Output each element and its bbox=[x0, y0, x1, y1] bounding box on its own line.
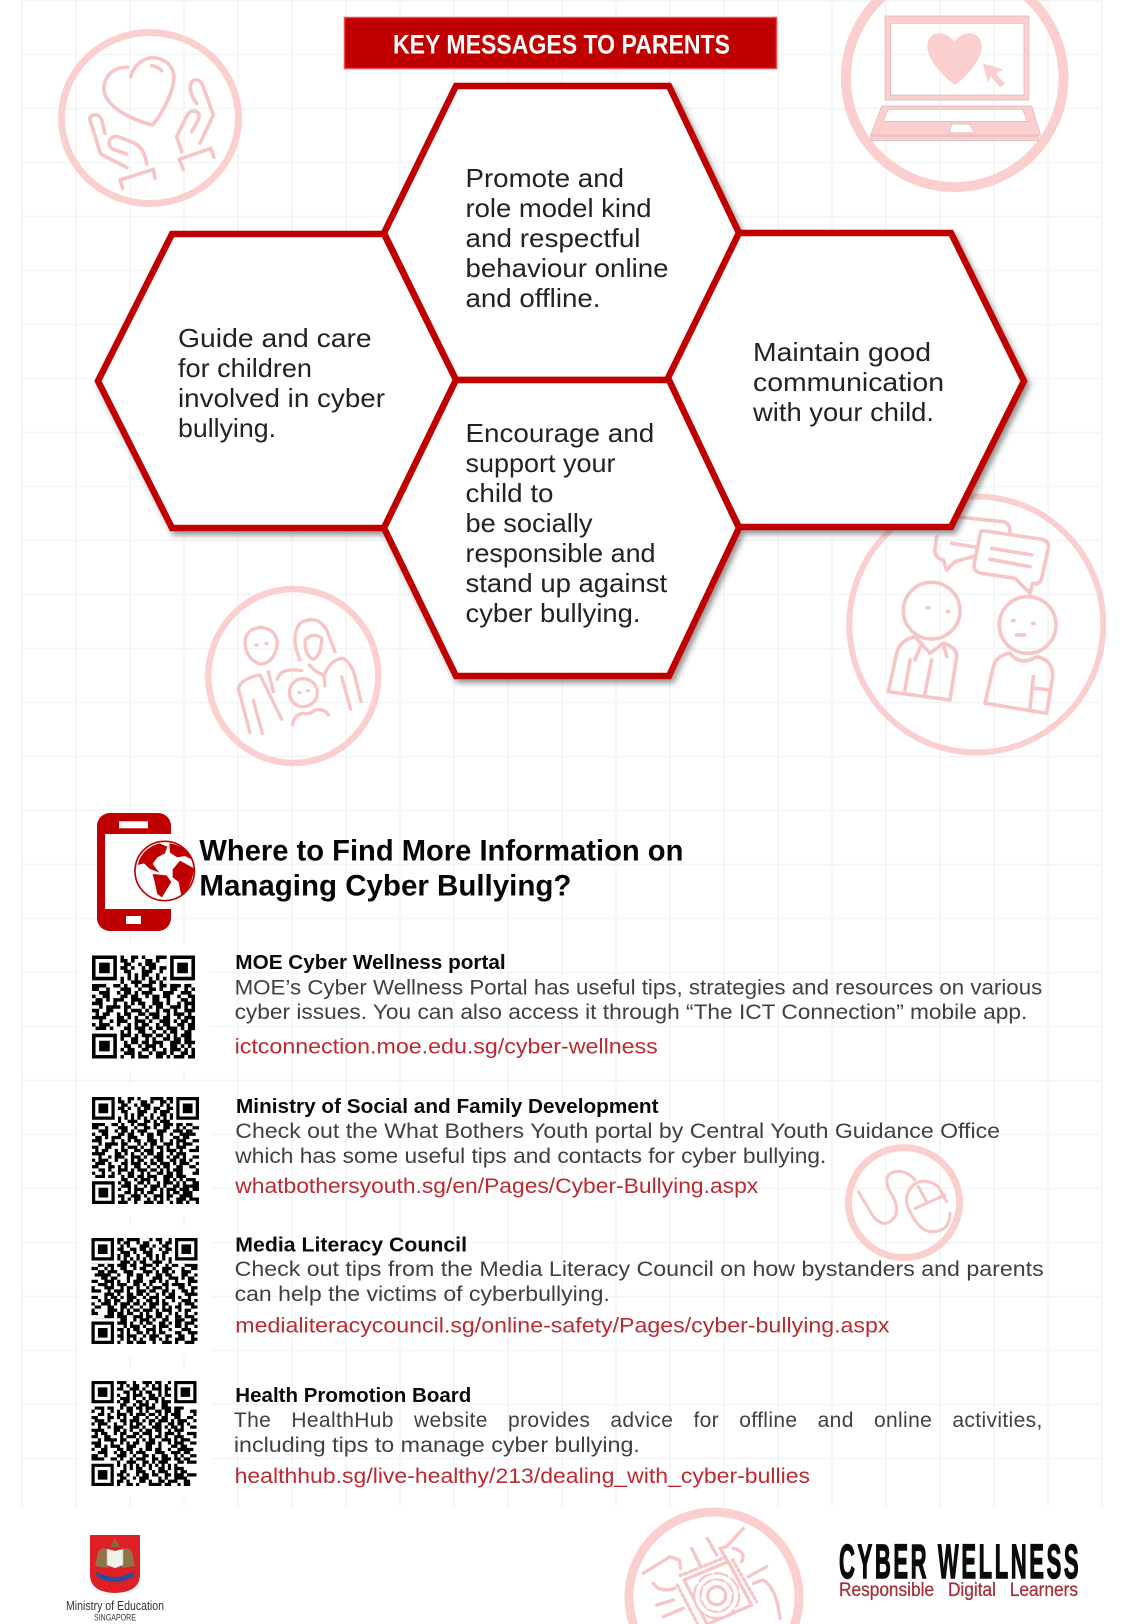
panel: MOE Cyber Wellness resource bbox=[78, 943, 1042, 1071]
hexagon text: communication bbox=[752, 337, 944, 427]
panel: MOE Cyber Wellness resource: ictconnection.moe.edu.sg/cyber-wellness bbox=[235, 1035, 658, 1058]
panel: Health Promotion Board resource: including tips to manage cyber bullying. bbox=[234, 1434, 640, 1457]
panel: Media Literacy Council resource: Media Literacy Council bbox=[235, 1234, 467, 1256]
logo: Cyber Wellness: CYBER WELLNESS bbox=[839, 1534, 1079, 1588]
panel: Media Literacy Council resource: medialiteracycouncil.sg/online-safety/Pages/cyber-bullying.aspx bbox=[235, 1314, 890, 1337]
panel: MOE Cyber Wellness resource: MOE’s Cyber Wellness Portal has useful tips, strategies and resources on various bbox=[235, 976, 1042, 999]
panel: Health Promotion Board resource: healthhub.sg/live-healthy/213/dealing_with_cyber-bullies bbox=[235, 1465, 810, 1488]
panel: Ministry of Social and Family Development resource: Check out the What Bothers Youth portal by Central Youth Guidance Office bbox=[235, 1120, 1000, 1143]
QR code: MSF bbox=[92, 1097, 199, 1204]
panel: Ministry of Social and Family Development resource bbox=[78, 1085, 1000, 1216]
panel: Ministry of Social and Family Development resource: Ministry of Social and Family Development bbox=[236, 1096, 659, 1118]
hexagon text: communication: communication bbox=[753, 367, 944, 397]
panel: Media Literacy Council resource: can help the victims of cyberbullying. bbox=[235, 1283, 610, 1306]
icon: laptop with heart bbox=[846, 0, 1064, 187]
hexagon text: socially responsible: be socially bbox=[466, 508, 592, 538]
panel: Ministry of Social and Family Development resource: whatbothersyouth.sg/en/Pages/Cyber-Bullying.aspx bbox=[234, 1175, 759, 1198]
panel: Health Promotion Board resource bbox=[78, 1369, 1042, 1498]
logo: Ministry of Education crest bbox=[66, 1535, 164, 1624]
icon: computer mouse bbox=[848, 1148, 960, 1258]
hexagon text: role model bbox=[466, 163, 668, 313]
panel: Ministry of Social and Family Development resource: which has some useful tips and contacts for cyber bullying. bbox=[234, 1145, 826, 1168]
icon: microchip with gear bbox=[629, 1512, 799, 1624]
panel: Health Promotion Board resource: The HealthHub website provides advice for offline and online activities, bbox=[234, 1409, 1042, 1432]
hexagon text: socially responsible: responsible and bbox=[466, 538, 656, 568]
hexagon text: guide and care: bullying. bbox=[178, 413, 276, 443]
title banner: KEY MESSAGES TO PARENTS bbox=[393, 30, 730, 60]
panel: Media Literacy Council resource: Check out tips from the Media Literacy Council on how bystanders and parents bbox=[235, 1258, 1044, 1281]
hexagon text: role model: behaviour online bbox=[466, 253, 668, 283]
hexagon text: guide and care: involved in cyber bbox=[178, 383, 385, 413]
hexagon text: guide and care: for children bbox=[178, 353, 312, 383]
panel: Health Promotion Board resource: Health Promotion Board bbox=[235, 1385, 471, 1407]
title banner bbox=[344, 18, 776, 68]
QR code: Media Literacy Council bbox=[92, 1238, 198, 1344]
icon: family bbox=[208, 589, 378, 763]
panel: key message hexagons bbox=[98, 86, 1024, 676]
icon: hands and heart bbox=[62, 32, 238, 204]
hexagon text: socially responsible bbox=[466, 418, 668, 628]
panel: MOE Cyber Wellness resource: cyber issues. You can also access it through “The ICT Connection” mobile app. bbox=[235, 1001, 1027, 1024]
panel: Media Literacy Council resource bbox=[78, 1226, 1044, 1356]
QR code: Health Promotion Board bbox=[92, 1381, 196, 1486]
heading: where to find more information: Where to Find More Information on bbox=[199, 834, 683, 867]
hexagon text: role model: and offline. bbox=[466, 283, 600, 313]
hexagon text: guide and care bbox=[178, 323, 385, 443]
panel: MOE Cyber Wellness resource: MOE Cyber Wellness portal bbox=[235, 952, 506, 974]
QR code: MOE bbox=[92, 956, 195, 1058]
hexagon text: socially responsible: stand up against bbox=[466, 568, 668, 598]
icon: two people talking bbox=[849, 496, 1103, 752]
logo: Ministry of Education crest: SINGAPORE bbox=[94, 1613, 136, 1624]
logo: Cyber Wellness: Responsible Digital Learners bbox=[839, 1580, 1078, 1601]
hexagon text: guide and care: Guide and care bbox=[178, 323, 372, 353]
heading: where to find more information: Managing Cyber Bullying? bbox=[199, 870, 571, 903]
hexagon text: role model: Promote and bbox=[466, 163, 624, 193]
heading: where to find more information bbox=[199, 834, 683, 903]
hexagon text: role model: and respectful bbox=[466, 223, 640, 253]
hexagon text: communication: with your child. bbox=[752, 397, 934, 427]
hexagon text: socially responsible: child to bbox=[466, 478, 554, 508]
icon: phone with globe bbox=[97, 813, 194, 931]
hexagon text: socially responsible: cyber bullying. bbox=[466, 598, 640, 628]
hexagon text: socially responsible: support your bbox=[466, 448, 616, 478]
hexagon text: socially responsible: Encourage and bbox=[466, 418, 654, 448]
logo: Ministry of Education crest: Ministry of Education bbox=[66, 1598, 164, 1613]
hexagon text: communication: Maintain good bbox=[753, 337, 931, 367]
hexagon text: role model: role model kind bbox=[466, 193, 652, 223]
